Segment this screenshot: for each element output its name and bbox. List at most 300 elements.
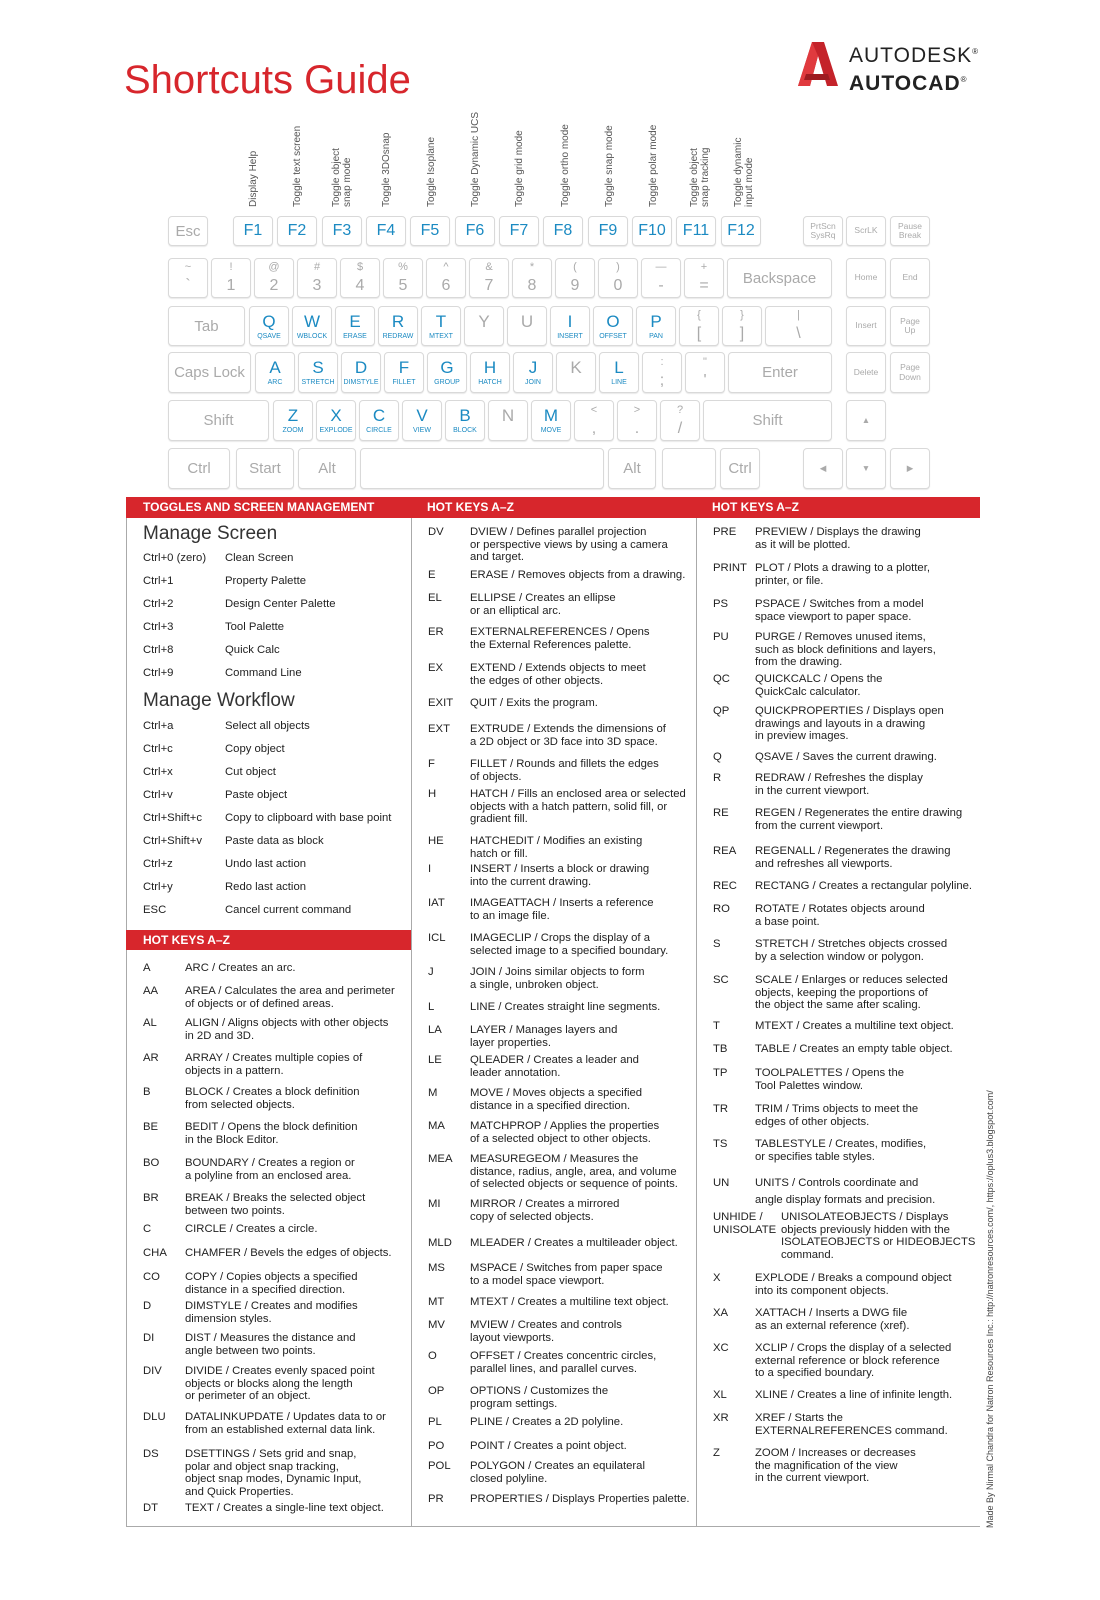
- panel: hot keys A-D: BR: [143, 1192, 159, 1204]
- keyboard: 1: [227, 277, 235, 294]
- panel: screen management: Ctrl+y: [143, 881, 173, 893]
- panel: hot keys P-Z: REGEN / Regenerates the entire drawing: [755, 807, 962, 819]
- panel: hot keys A-D: object snap modes, Dynamic Input,: [185, 1473, 361, 1485]
- panel: hot keys P-Z: ROTATE / Rotates objects around: [755, 903, 925, 915]
- panel: hot keys P-Z: REDRAW / Refreshes the display: [755, 772, 923, 784]
- panel: hot keys D-P: ICL: [428, 932, 446, 944]
- panel: hot keys A-D: DIST / Measures the distance and: [185, 1332, 356, 1344]
- function key labels: Toggle polar mode: [648, 125, 659, 207]
- function key labels: Toggle dynamic: [733, 138, 744, 207]
- panel: hot keys P-Z: QC: [713, 673, 730, 685]
- panel: hot keys D-P: EXTRUDE / Extends the dimensions of: [470, 723, 666, 735]
- function key labels: Toggle text screen: [292, 126, 303, 207]
- panel: hot keys P-Z: TABLE / Creates an empty table object.: [755, 1043, 953, 1055]
- keyboard: Shift: [752, 412, 782, 429]
- panel: hot keys A-D: distance in a specified direction.: [185, 1284, 345, 1296]
- panel: hot keys P-Z: SC: [713, 974, 729, 986]
- panel: hot keys P-Z: UNHIDE /: [713, 1211, 763, 1223]
- panel: hot keys D-P: EL: [428, 592, 442, 604]
- panel: hot keys A-D: DT: [143, 1502, 158, 1514]
- panel: hot keys D-P: INSERT / Inserts a block or drawing: [470, 863, 649, 875]
- header bar: HOT KEYS A–Z: [712, 500, 799, 514]
- keyboard: ◀: [820, 463, 826, 473]
- keyboard: 2: [270, 277, 278, 294]
- table frame lines: [126, 518, 127, 1527]
- keyboard: F2: [288, 222, 306, 239]
- keyboard: ;: [660, 372, 664, 388]
- keyboard: ScrLK: [854, 225, 878, 235]
- panel: screen management: Ctrl+v: [143, 789, 173, 801]
- panel: hot keys D-P: closed polyline.: [470, 1472, 547, 1484]
- panel: hot keys P-Z: TABLESTYLE / Creates, modifies,: [755, 1138, 926, 1150]
- keyboard: F10: [638, 222, 666, 239]
- keyboard: G: [440, 358, 454, 377]
- keyboard: Down: [899, 372, 921, 382]
- second header bar: [126, 930, 411, 950]
- panel: hot keys D-P: MATCHPROP / Applies the properties: [470, 1120, 659, 1132]
- panel: hot keys A-D: dimension styles.: [185, 1312, 272, 1324]
- panel: hot keys P-Z: QuickCalc calculator.: [755, 686, 860, 698]
- panel: hot keys D-P: to a model space viewport.: [470, 1274, 604, 1286]
- keyboard: ?: [677, 404, 683, 416]
- keyboard: Start: [249, 460, 281, 477]
- panel: hot keys D-P: MVIEW / Creates and controls: [470, 1319, 622, 1331]
- keyboard: ^: [443, 261, 449, 273]
- keyboard: 8: [528, 277, 536, 294]
- second header bar: HOT KEYS A–Z: [143, 933, 230, 947]
- keyboard: F5: [421, 222, 439, 239]
- panel: hot keys A-D: D: [143, 1300, 151, 1312]
- panel: hot keys P-Z: UNITS / Controls coordinate and: [755, 1177, 918, 1189]
- panel: screen management: Tool Palette: [225, 621, 284, 633]
- panel: hot keys D-P: OP: [428, 1385, 444, 1397]
- panel: screen management: Ctrl+3: [143, 621, 173, 633]
- keyboard: F1: [244, 222, 262, 239]
- panel: hot keys D-P: parallel lines, and parallel curves.: [470, 1362, 637, 1374]
- logo text: AUTOCAD®: [849, 72, 968, 95]
- keyboard: QSAVE: [257, 332, 281, 340]
- panel: screen management: Ctrl+2: [143, 598, 173, 610]
- panel: hot keys D-P: MS: [428, 1262, 445, 1274]
- panel: hot keys D-P: EXIT: [428, 697, 453, 709]
- keyboard: *: [530, 261, 534, 273]
- panel: screen management: Quick Calc: [225, 644, 280, 656]
- panel: hot keys D-P: J: [428, 966, 434, 978]
- keyboard: 5: [399, 277, 407, 294]
- heading: manage workflow: Manage Workflow: [143, 690, 295, 711]
- keyboard: Y: [478, 312, 490, 330]
- panel: hot keys P-Z: XC: [713, 1342, 729, 1354]
- panel: hot keys D-P: distance in a specified direction.: [470, 1100, 630, 1112]
- panel: screen management: Ctrl+9: [143, 667, 173, 679]
- panel: screen management: Ctrl+c: [143, 743, 173, 755]
- panel: hot keys A-D: CHAMFER / Bevels the edges of objects.: [185, 1247, 392, 1259]
- panel: hot keys D-P: OFFSET / Creates concentric circles,: [470, 1350, 656, 1362]
- keyboard: T: [436, 312, 446, 330]
- panel: hot keys P-Z: PRINT: [713, 562, 747, 574]
- panel: hot keys P-Z: into its component objects.: [755, 1284, 889, 1296]
- keyboard: [168, 216, 930, 490]
- panel: hot keys P-Z: S: [713, 938, 721, 950]
- panel: hot keys D-P: POINT / Creates a point object.: [470, 1440, 627, 1452]
- keyboard: :: [660, 356, 664, 368]
- panel: screen management: Undo last action: [225, 858, 306, 870]
- logo text: [849, 44, 979, 95]
- panel: hot keys D-P: H: [428, 788, 436, 800]
- panel: hot keys D-P: ELLIPSE / Creates an ellipse: [470, 592, 616, 604]
- panel: hot keys D-P: E: [428, 569, 436, 581]
- panel: hot keys P-Z: XATTACH / Inserts a DWG file: [755, 1307, 907, 1319]
- keyboard: \: [796, 325, 801, 342]
- keyboard: I: [568, 312, 572, 330]
- panel: hot keys A-D: in the Block Editor.: [185, 1134, 279, 1146]
- function key labels: input mode: [744, 158, 755, 207]
- panel: hot keys D-P: MLEADER / Creates a multileader object.: [470, 1237, 678, 1249]
- panel: hot keys D-P: ERASE / Removes objects from a drawing.: [470, 569, 685, 581]
- panel: hot keys A-D: polar and object snap tracking,: [185, 1460, 339, 1472]
- panel: hot keys A-D: B: [143, 1086, 151, 1098]
- panel: hot keys D-P: MTEXT / Creates a multiline text object.: [470, 1296, 669, 1308]
- keyboard: E: [349, 312, 361, 330]
- panel: screen management: Cut object: [225, 766, 276, 778]
- keyboard: [: [697, 325, 701, 342]
- keyboard: (: [573, 261, 577, 273]
- bottom row: Ctrl: [187, 460, 211, 477]
- panel: hot keys P-Z: printer, or file.: [755, 574, 823, 586]
- keyboard: 3: [313, 277, 321, 294]
- keyboard: =: [699, 277, 709, 294]
- panel: hot keys P-Z: in the current viewport.: [755, 784, 869, 796]
- panel: hot keys P-Z: PREVIEW / Displays the drawing: [755, 526, 921, 538]
- keyboard: &: [485, 261, 493, 273]
- keyboard: S: [312, 358, 324, 377]
- keyboard: Up: [905, 325, 915, 335]
- panel: hot keys P-Z: XL: [713, 1389, 727, 1401]
- panel: hot keys P-Z: RE: [713, 807, 729, 819]
- function key labels: Toggle 3DOsnap: [381, 132, 392, 207]
- panel: hot keys D-P: HE: [428, 835, 444, 847]
- keyboard: +: [701, 261, 707, 273]
- keyboard: Break: [899, 230, 921, 240]
- panel: hot keys P-Z: QUICKCALC / Opens the: [755, 673, 882, 685]
- keyboard: M: [544, 406, 558, 425]
- credit text: Made By Nirmal Chandra for Natron Resources Inc.: http://natronresources.com/, https://oplus3.blogspot.com/: [985, 1090, 995, 1528]
- panel: hot keys D-P: PLINE / Creates a 2D polyline.: [470, 1416, 623, 1428]
- logo text: AUTODESK®: [849, 44, 979, 67]
- panel: hot keys D-P: a 2D object or 3D face into 3D space.: [470, 736, 658, 748]
- panel: hot keys D-P: leader annotation.: [470, 1066, 560, 1078]
- keyboard: F9: [599, 222, 617, 239]
- panel: screen management: Design Center Palette: [225, 598, 336, 610]
- header bar: HOT KEYS A–Z: [427, 500, 514, 514]
- panel: hot keys P-Z: such as block definitions and layers,: [755, 644, 936, 656]
- keyboard: ARC: [268, 379, 282, 386]
- keyboard: DIMSTYLE: [343, 379, 378, 386]
- keyboard: F12: [727, 222, 755, 239]
- panel: hot keys D-P: POL: [428, 1460, 451, 1472]
- panel: hot keys D-P: HATCH / Fills an enclosed area or selected: [470, 788, 686, 800]
- panel: hot keys A-D: CHA: [143, 1247, 167, 1259]
- keyboard: BLOCK: [453, 427, 477, 434]
- panel: hot keys P-Z: and refreshes all viewports.: [755, 858, 893, 870]
- panel: hot keys P-Z: RECTANG / Creates a rectangular polyline.: [755, 880, 972, 892]
- panel: hot keys P-Z: as an external reference (xref).: [755, 1320, 909, 1332]
- panel: hot keys D-P: PL: [428, 1416, 442, 1428]
- keyboard: ": [703, 356, 707, 368]
- panel: screen management: Ctrl+z: [143, 858, 173, 870]
- panel: hot keys P-Z: PS: [713, 598, 728, 610]
- panel: hot keys P-Z: XLINE / Creates a line of infinite length.: [755, 1389, 952, 1401]
- panel: hot keys P-Z: R: [713, 772, 721, 784]
- panel: hot keys P-Z: XREF / Starts the: [755, 1412, 843, 1424]
- panel: hot keys A-D: from selected objects.: [185, 1098, 295, 1110]
- keyboard: F: [399, 358, 409, 377]
- panel: hot keys P-Z: ZOOM / Increases or decreases: [755, 1447, 916, 1459]
- panel: hot keys P-Z: MTEXT / Creates a multiline text object.: [755, 1020, 954, 1032]
- panel: hot keys A-D: from an established external data link.: [185, 1424, 375, 1436]
- panel: hot keys A-D: BO: [143, 1157, 159, 1169]
- panel: hot keys A-D: DS: [143, 1448, 159, 1460]
- panel: hot keys D-P: PO: [428, 1440, 444, 1452]
- panel: hot keys P-Z: STRETCH / Stretches objects crossed: [755, 938, 947, 950]
- function key labels: snap mode: [342, 158, 353, 207]
- panel: hot keys D-P: DV: [428, 526, 444, 538]
- keyboard: ]: [740, 325, 744, 342]
- panel: hot keys D-P: a single, unbroken object.: [470, 978, 599, 990]
- panel: hot keys P-Z: objects, keeping the proportions of: [755, 986, 928, 998]
- panel: hot keys D-P: DVIEW / Defines parallel projection: [470, 526, 646, 538]
- panel: hot keys P-Z: TS: [713, 1138, 727, 1150]
- panel: hot keys P-Z: as it will be plotted.: [755, 538, 850, 550]
- keyboard: INSERT: [557, 332, 583, 340]
- panel: hot keys A-D: TEXT / Creates a single-line text object.: [185, 1502, 384, 1514]
- panel: hot keys A-D: ALIGN / Aligns objects with other objects: [185, 1017, 388, 1029]
- panel: screen management: Ctrl+8: [143, 644, 173, 656]
- panel: screen management: Copy to clipboard with base point: [225, 812, 391, 824]
- panel: hot keys D-P: QLEADER / Creates a leader and: [470, 1054, 639, 1066]
- panel: hot keys A-D: DLU: [143, 1411, 166, 1423]
- keyboard: Pause: [898, 221, 922, 231]
- panel: hot keys A-D: a polyline from an enclosed area.: [185, 1170, 351, 1182]
- keyboard: F7: [510, 222, 528, 239]
- panel: hot keys D-P: the External References palette.: [470, 638, 631, 650]
- panel: hot keys P-Z: [713, 526, 975, 1484]
- panel: screen management: Copy object: [225, 743, 285, 755]
- panel: hot keys D-P: EXTERNALREFERENCES / Opens: [470, 626, 650, 638]
- keyboard: A: [269, 358, 281, 377]
- panel: hot keys D-P: O: [428, 1350, 437, 1362]
- keyboard: PrtScn: [810, 221, 836, 231]
- keyboard: !: [229, 261, 233, 273]
- panel: hot keys D-P: JOIN / Joins similar objects to form: [470, 966, 645, 978]
- panel: hot keys P-Z: PU: [713, 631, 729, 643]
- panel: screen management: Ctrl+1: [143, 575, 173, 587]
- panel: hot keys P-Z: by a selection window or polygon.: [755, 950, 924, 962]
- panel: hot keys P-Z: QP: [713, 705, 729, 717]
- panel: screen management: Cancel current command: [225, 904, 351, 916]
- panel: hot keys P-Z: SCALE / Enlarges or reduces selected: [755, 974, 948, 986]
- panel: hot keys P-Z: UNISOLATE: [713, 1224, 776, 1236]
- panel: hot keys D-P: of objects.: [470, 770, 522, 782]
- panel: hot keys A-D: ARRAY / Creates multiple copies of: [185, 1052, 362, 1064]
- panel: hot keys D-P: F: [428, 758, 435, 770]
- panel: screen management: Ctrl+Shift+v: [143, 835, 202, 847]
- bottom row: [168, 448, 230, 489]
- keyboard: Delete: [854, 367, 878, 377]
- panel: hot keys D-P: IMAGECLIP / Crops the display of a: [470, 932, 650, 944]
- panel: hot keys D-P: or an elliptical arc.: [470, 604, 561, 616]
- panel: hot keys A-D: [143, 962, 395, 1514]
- panel: hot keys A-D: BREAK / Breaks the selected object: [185, 1192, 365, 1204]
- panel: hot keys D-P: and target.: [470, 551, 524, 563]
- panel: hot keys A-D: BLOCK / Creates a block definition: [185, 1086, 360, 1098]
- keyboard: JOIN: [525, 379, 541, 386]
- panel: hot keys D-P: FILLET / Rounds and fillets the edges: [470, 758, 659, 770]
- panel: hot keys P-Z: TB: [713, 1043, 727, 1055]
- panel: hot keys P-Z: PLOT / Plots a drawing to a plotter,: [755, 562, 930, 574]
- panel: hot keys D-P: MOVE / Moves objects a specified: [470, 1087, 642, 1099]
- shift row: [168, 400, 269, 441]
- panel: screen management: Paste object: [225, 789, 287, 801]
- keyboard: ▲: [862, 415, 870, 425]
- keyboard: >: [634, 404, 640, 416]
- panel: hot keys P-Z: TP: [713, 1067, 727, 1079]
- panel: hot keys A-D: AR: [143, 1052, 159, 1064]
- panel: hot keys P-Z: PURGE / Removes unused items,: [755, 631, 926, 643]
- keyboard: Insert: [855, 320, 877, 330]
- panel: hot keys D-P: OPTIONS / Customizes the: [470, 1385, 608, 1397]
- keyboard: OFFSET: [599, 332, 627, 340]
- keyboard: End: [902, 272, 918, 282]
- panel: hot keys P-Z: REC: [713, 880, 737, 892]
- panel: hot keys A-D: BOUNDARY / Creates a region or: [185, 1157, 355, 1169]
- panel: screen management: Paste data as block: [225, 835, 324, 847]
- panel: hot keys D-P: MV: [428, 1319, 445, 1331]
- panel: hot keys P-Z: UNISOLATEOBJECTS / Displays: [781, 1211, 948, 1223]
- panel: hot keys P-Z: T: [713, 1020, 720, 1032]
- panel: hot keys A-D: objects in a pattern.: [185, 1064, 284, 1076]
- panel: hot keys D-P: selected image to a specified boundary.: [470, 944, 668, 956]
- panel: hot keys D-P: LAYER / Manages layers and: [470, 1024, 617, 1036]
- panel: hot keys P-Z: ISOLATEOBJECTS or HIDEOBJECTS: [781, 1236, 975, 1248]
- keyboard: CIRCLE: [366, 427, 392, 434]
- keyboard: }: [740, 309, 744, 321]
- keyboard: P: [650, 312, 662, 330]
- panel: hot keys A-D: BEDIT / Opens the block definition: [185, 1121, 357, 1133]
- panel: hot keys P-Z: in preview images.: [755, 730, 849, 742]
- panel: hot keys D-P: EXTEND / Extends objects to meet: [470, 662, 646, 674]
- panel: hot keys A-D: AA: [143, 985, 158, 997]
- function key labels: Toggle grid mode: [514, 130, 525, 207]
- keyboard: ): [616, 261, 620, 273]
- keyboard: D: [355, 358, 367, 377]
- function key labels: Toggle object: [689, 148, 700, 207]
- keyboard: J: [529, 358, 537, 377]
- panel: hot keys D-P: MI: [428, 1198, 441, 1210]
- panel: hot keys A-D: AREA / Calculates the area and perimeter: [185, 985, 395, 997]
- panel: hot keys P-Z: TRIM / Trims objects to meet the: [755, 1103, 918, 1115]
- panel: screen management: Ctrl+x: [143, 766, 173, 778]
- panel: hot keys A-D: or perimeter of an object.: [185, 1390, 311, 1402]
- keyboard: MOVE: [541, 427, 561, 434]
- panel: hot keys A-D: COPY / Copies objects a specified: [185, 1271, 357, 1283]
- keyboard: R: [392, 312, 404, 330]
- panel: screen management: Command Line: [225, 667, 302, 679]
- panel: hot keys D-P: PROPERTIES / Displays Properties palette.: [470, 1493, 690, 1505]
- panel: hot keys P-Z: from the drawing.: [755, 656, 842, 668]
- keyboard: -: [658, 277, 664, 294]
- qwerty row: [168, 306, 245, 346]
- panel: hot keys P-Z: EXTERNALREFERENCES command.: [755, 1424, 948, 1436]
- panel: hot keys P-Z: XCLIP / Crops the display of a selected: [755, 1342, 951, 1354]
- keyboard: {: [697, 309, 701, 321]
- panel: hot keys P-Z: angle display formats and precision.: [755, 1194, 935, 1206]
- keyboard: Alt: [623, 460, 641, 477]
- keyboard: K: [570, 358, 582, 377]
- panel: hot keys P-Z: REA: [713, 845, 736, 857]
- keyboard: ▶: [907, 463, 913, 473]
- panel: hot keys P-Z: from the current viewport.: [755, 820, 883, 832]
- keyboard: REDRAW: [383, 332, 413, 340]
- icon: autocad A: [798, 42, 838, 86]
- panel: hot keys D-P: QUIT / Exits the program.: [470, 697, 598, 709]
- shift row: Shift: [203, 412, 234, 429]
- panel: hot keys A-D: DIVIDE / Creates evenly spaced point: [185, 1365, 375, 1377]
- panel: screen management: Ctrl+0 (zero): [143, 552, 206, 564]
- keyboard: V: [416, 406, 428, 425]
- panel: hot keys D-P: layout viewports.: [470, 1332, 554, 1344]
- number row: `: [185, 277, 191, 294]
- panel: hot keys D-P: MA: [428, 1120, 445, 1132]
- panel: screen management: [143, 523, 392, 916]
- panel: hot keys D-P: MEA: [428, 1153, 452, 1165]
- panel: hot keys D-P: PR: [428, 1493, 444, 1505]
- keyboard: U: [521, 312, 533, 330]
- keyboard: ERASE: [343, 332, 367, 340]
- panel: hot keys P-Z: or specifies table styles.: [755, 1150, 875, 1162]
- panel: hot keys D-P: EX: [428, 662, 443, 674]
- panel: hot keys D-P: distance, radius, angle, area, and volume: [470, 1166, 677, 1178]
- function key labels: Toggle object: [331, 148, 342, 207]
- panel: hot keys D-P: program settings.: [470, 1398, 557, 1410]
- panel: hot keys P-Z: space viewport to paper space.: [755, 610, 911, 622]
- panel: hot keys D-P: or perspective views by using a camera: [470, 538, 668, 550]
- panel: screen management: Redo last action: [225, 881, 306, 893]
- panel: hot keys D-P: LINE / Creates straight line segments.: [470, 1001, 660, 1013]
- panel: screen management: Ctrl+Shift+c: [143, 812, 202, 824]
- panel: screen management: Ctrl+a: [143, 720, 173, 732]
- panel: screen management: Property Palette: [225, 575, 306, 587]
- keyboard: .: [635, 420, 639, 436]
- panel: hot keys A-D: of objects or of defined areas.: [185, 998, 334, 1010]
- keyboard: H: [484, 358, 496, 377]
- panel: hot keys D-P: MT: [428, 1296, 444, 1308]
- keyboard: EXPLODE: [319, 427, 353, 434]
- function key labels: Toggle snap mode: [604, 125, 615, 207]
- keyboard: ▼: [862, 463, 870, 473]
- keyboard: LINE: [611, 379, 627, 386]
- panel: hot keys D-P: ER: [428, 626, 444, 638]
- keyboard: ': [703, 372, 707, 388]
- keyboard: PAN: [649, 332, 663, 340]
- keyboard: ,: [592, 420, 596, 436]
- panel: hot keys D-P: MSPACE / Switches from paper space: [470, 1262, 663, 1274]
- keyboard: HATCH: [478, 379, 502, 386]
- panel: hot keys P-Z: PRE: [713, 526, 736, 538]
- panel: hot keys D-P: LA: [428, 1024, 442, 1036]
- function key labels: Toggle Isoplane: [426, 137, 437, 207]
- panel: hot keys A-D: and Quick Properties.: [185, 1486, 294, 1498]
